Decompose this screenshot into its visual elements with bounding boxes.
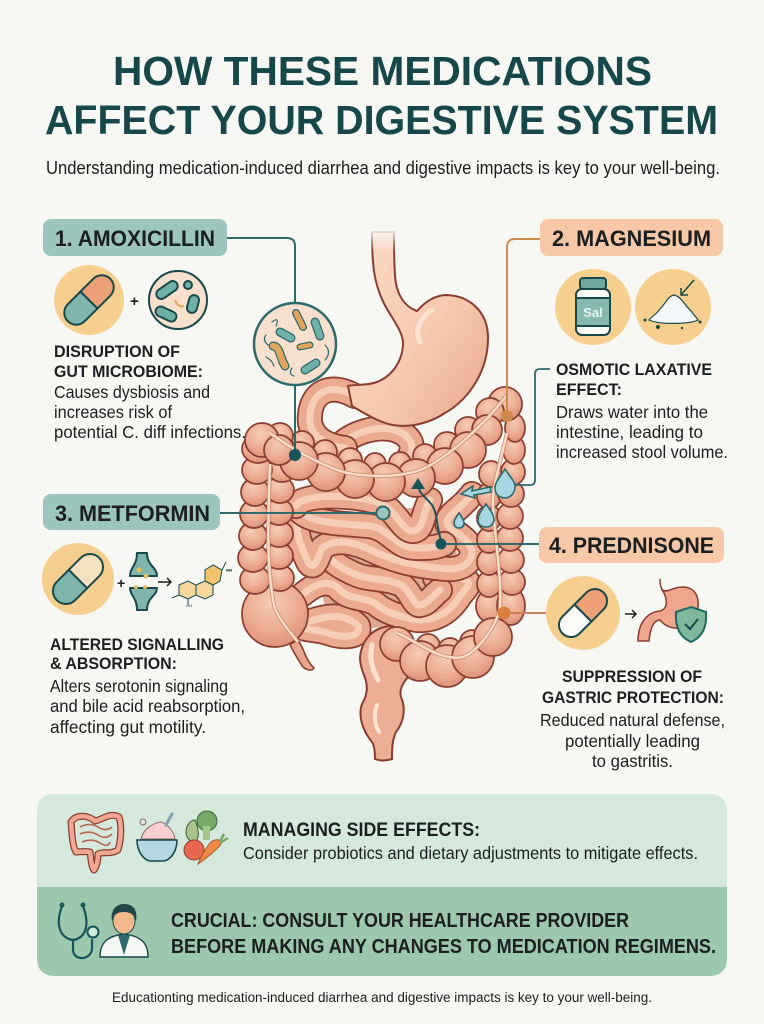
icon: steroid molecule: OH	[226, 568, 232, 573]
panel: 2 magnesium	[540, 219, 728, 462]
title: HOW THESE MEDICATIONS	[113, 48, 652, 94]
ascending colon	[238, 435, 314, 670]
icon: capsule	[54, 265, 124, 335]
transverse colon	[245, 387, 522, 501]
icon: powder pile	[635, 269, 711, 345]
panel: managing side effects	[37, 794, 727, 887]
text: altered signalling and absorption: ALTERED SIGNALLING	[50, 635, 224, 654]
heading: prednisone: 4. PREDNISONE	[549, 533, 714, 558]
text: disruption of gut microbiome: GUT MICROBIOME:	[54, 362, 203, 381]
text: disruption of gut microbiome	[54, 342, 246, 442]
icon: steroid molecule	[172, 562, 232, 608]
text: crucial warning: BEFORE MAKING ANY CHANGES TO MEDICATION REGIMENS.	[171, 936, 716, 958]
heading: amoxicillin: 1. AMOXICILLIN	[55, 226, 215, 251]
text: osmotic laxative effect: intestine, leading to	[556, 422, 703, 442]
panel: 4 prednisone	[539, 527, 725, 771]
icon: yogurt bowl	[137, 814, 177, 861]
text: disruption of gut microbiome: increases risk of	[54, 402, 172, 422]
marker dots	[289, 410, 513, 620]
text: suppression of gastric protection: potentially leading	[565, 731, 700, 751]
descending colon	[476, 414, 525, 625]
icon: capsule	[42, 543, 114, 615]
water drops	[454, 469, 515, 528]
text: managing side effects	[243, 820, 698, 863]
heading: prednisone	[539, 527, 724, 563]
arrow	[625, 610, 636, 618]
icon: protected stomach	[638, 579, 706, 642]
text: suppression of gastric protection	[540, 667, 725, 771]
heading: magnesium: 2. MAGNESIUM	[552, 226, 711, 251]
heading: magnesium	[540, 219, 723, 256]
title: AFFECT YOUR DIGESTIVE SYSTEM	[45, 97, 718, 143]
arrow	[158, 578, 171, 586]
icon: capsule	[546, 576, 620, 650]
panel: consult your healthcare provider	[37, 887, 727, 976]
title	[45, 48, 718, 143]
plus sign: +	[117, 575, 125, 591]
text: osmotic laxative effect	[556, 360, 728, 462]
icon: steroid molecule: OH	[186, 603, 192, 608]
text: disruption of gut microbiome: potential C. diff infections.	[54, 422, 246, 442]
icon: supplement bottle: Sal	[583, 305, 603, 320]
text: altered signalling and absorption: & ABSORPTION:	[50, 654, 177, 673]
digestive system illustration	[238, 228, 525, 760]
text: altered signalling and absorption: Alters serotonin signaling	[50, 676, 228, 696]
connector: metformin to intestine	[220, 512, 378, 514]
text: altered signalling and absorption	[50, 635, 245, 737]
plus sign: +	[130, 293, 139, 310]
text: suppression of gastric protection: SUPPRESSION OF	[562, 667, 702, 686]
icon: stethoscope	[59, 904, 98, 958]
panel: 1 amoxicillin	[43, 219, 246, 442]
footer note: Educationting medication-induced diarrhea and digestive impacts is key to your well-being.	[112, 990, 652, 1005]
connector: magnesium to colon	[507, 239, 540, 416]
icon: bacteria	[149, 271, 207, 329]
text: osmotic laxative effect: OSMOTIC LAXATIVE	[556, 360, 712, 379]
text: osmotic laxative effect: EFFECT:	[556, 380, 622, 399]
panel: 3 metformin	[42, 494, 245, 737]
text: altered signalling and absorption: affecting gut motility.	[50, 717, 206, 737]
colon center line	[268, 395, 507, 658]
arrow: motility curve	[411, 478, 441, 540]
text: altered signalling and absorption: and bile acid reabsorption,	[50, 696, 245, 716]
text: osmotic laxative effect: increased stool volume.	[556, 442, 728, 462]
subtitle: Understanding medication-induced diarrhea and digestive impacts is key to your well-being.	[46, 158, 720, 178]
text: disruption of gut microbiome: DISRUPTION OF	[54, 342, 180, 361]
connector: amoxicillin to colon	[227, 238, 295, 455]
text: suppression of gastric protection: Reduced natural defense,	[540, 710, 725, 730]
sigmoid colon and rectum	[360, 618, 512, 760]
microbiome magnified circle	[254, 303, 336, 385]
connector: prednisone to intestine	[441, 543, 540, 545]
text: crucial warning	[171, 910, 716, 958]
text: crucial warning: CRUCIAL: CONSULT YOUR HEALTHCARE PROVIDER	[171, 910, 629, 932]
icon: doctor	[100, 904, 148, 957]
text: osmotic laxative effect: Draws water into the	[556, 402, 708, 422]
text: managing side effects: MANAGING SIDE EFFECTS:	[243, 820, 480, 841]
connector: osmotic effect to water drop	[515, 369, 550, 485]
text: suppression of gastric protection: to gastritis.	[592, 751, 673, 771]
text: suppression of gastric protection: GASTRIC PROTECTION:	[542, 688, 724, 707]
text: disruption of gut microbiome: Causes dysbiosis and	[54, 382, 210, 402]
icon: vegetables	[184, 811, 228, 864]
stomach and esophagus	[348, 228, 488, 426]
heading: metformin	[43, 494, 220, 530]
heading: amoxicillin	[43, 219, 227, 256]
small intestine	[296, 390, 472, 636]
text: managing side effects: Consider probiotics and dietary adjustments to mitigate effects.	[243, 843, 698, 863]
icon: synapse	[130, 553, 157, 610]
arrow: water into intestine	[461, 486, 491, 498]
connector: prednisone to colon	[504, 612, 550, 614]
icon: supplement bottle	[555, 269, 631, 345]
heading: metformin: 3. METFORMIN	[55, 501, 210, 526]
icon: intestines	[71, 815, 121, 870]
